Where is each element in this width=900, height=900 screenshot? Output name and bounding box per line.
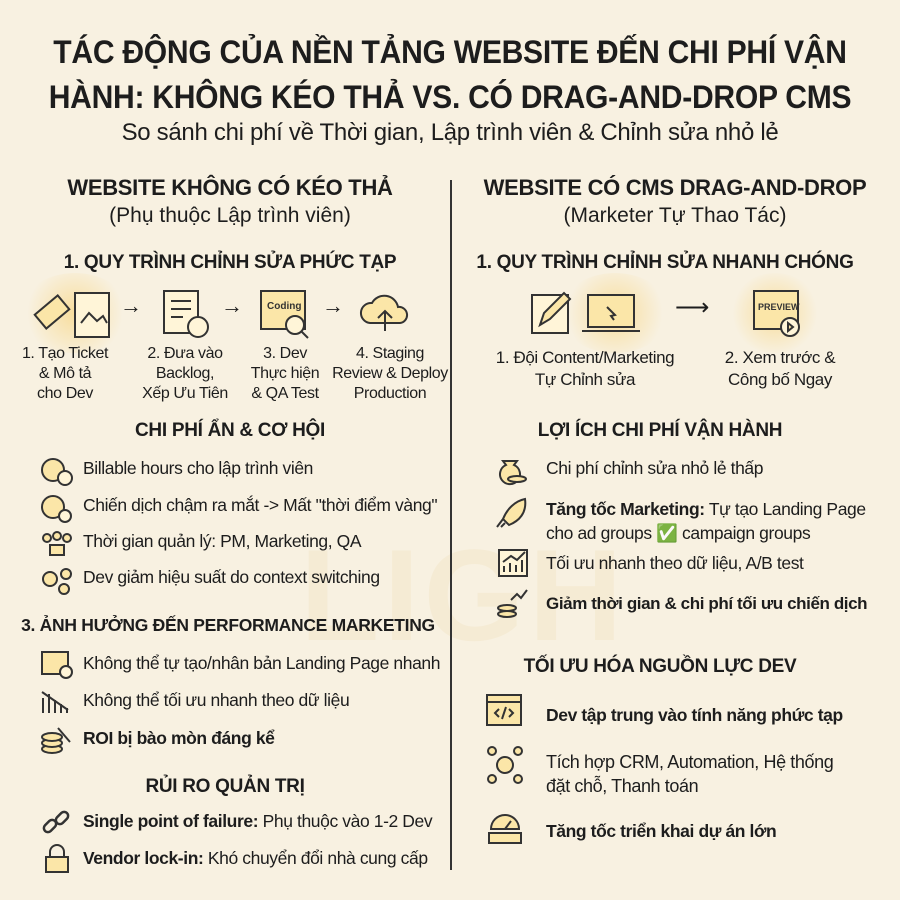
bullet list: hidden costs: Thời gian quản lý: PM, Marketing, QA: [83, 531, 361, 551]
bullet list: hidden costs: Chiến dịch chậm ra mắt -> Mất "thời điểm vàng": [83, 495, 437, 515]
bullet list: hidden costs: Billable hours cho lập trình viên: [83, 458, 313, 478]
bullet list: benefits: [496, 458, 867, 618]
process icons: [33, 273, 408, 353]
process labels: [22, 345, 108, 402]
panel: right: [476, 175, 867, 844]
process labels: & Mô tả: [39, 365, 91, 382]
right subheader: (Marketer Tự Thao Tác): [564, 204, 786, 227]
heading: governance risk: RỦI RO QUẢN TRỊ: [145, 776, 305, 797]
title: [49, 34, 851, 115]
bullet list: benefits: Giảm thời gian & chi phí tối ưu chiến dịch: [546, 594, 867, 613]
bullet list: risk: [42, 810, 432, 873]
process icons: [531, 273, 812, 353]
bullet list: performance: [41, 651, 440, 754]
bullet list: performance: ROI bị bào mòn đáng kể: [83, 728, 274, 748]
panel: left: Production: [354, 385, 426, 402]
bullet list: benefits: Chi phí chỉnh sửa nhỏ lẻ thấp: [546, 458, 763, 478]
process labels: cho Dev: [37, 385, 93, 402]
bullet list: performance: Không thể tối ưu nhanh theo dữ liệu: [83, 690, 349, 710]
bullet list: dev: Tăng tốc triển khai dự án lớn: [546, 821, 776, 841]
heading: benefits: LỢI ÍCH CHI PHÍ VẬN HÀNH: [538, 420, 782, 441]
left header: WEBSITE KHÔNG CÓ KÉO THẢ: [67, 175, 393, 200]
bullet list: hidden costs: [41, 458, 437, 595]
panel: left: 4. Staging: [356, 345, 424, 362]
left subheader: (Phụ thuộc Lập trình viên): [109, 204, 351, 227]
panel: left: Xếp Ưu Tiên: [142, 385, 228, 402]
title: TÁC ĐỘNG CỦA NỀN TẢNG WEBSITE ĐẾN CHI PHÍ VẬN: [53, 34, 847, 70]
panel: left: [21, 174, 448, 873]
subtitle: So sánh chi phí về Thời gian, Lập trình viên & Chỉnh sửa nhỏ lẻ: [122, 119, 778, 146]
watermark: LIGH: [300, 522, 627, 668]
panel: left: 2. Đưa vào: [147, 345, 223, 362]
process icons: Coding: [267, 301, 301, 312]
panel: right: Công bố Ngay: [728, 370, 832, 389]
process labels: Tự Chỉnh sửa: [535, 370, 635, 389]
panel: right: 2. Xem trước &: [725, 348, 835, 367]
panel: left: Backlog,: [156, 365, 214, 382]
title: HÀNH: KHÔNG KÉO THẢ VS. CÓ DRAG-AND-DROP CMS: [49, 79, 851, 115]
heading: process: 1. QUY TRÌNH CHỈNH SỬA PHỨC TẠP: [64, 252, 396, 273]
bullet list: performance: Không thể tự tạo/nhân bản Landing Page nhanh: [83, 653, 440, 673]
heading: fast process: 1. QUY TRÌNH CHỈNH SỬA NHANH CHÓNG: [476, 252, 854, 273]
panel: left: & QA Test: [251, 385, 319, 402]
arrow: →: [221, 293, 243, 318]
bullet list: benefits: Tối ưu nhanh theo dữ liệu, A/B test: [546, 553, 804, 573]
panel: left: Thực hiện: [251, 365, 319, 382]
right header: WEBSITE CÓ CMS DRAG-AND-DROP: [484, 175, 866, 200]
bullet list: risk: Single point of failure: Phụ thuộc vào 1-2 Dev: [83, 811, 432, 831]
bullet list: dev: [486, 694, 843, 844]
process icons: PREVIEW: [758, 302, 800, 312]
panel: left: Review & Deploy: [332, 365, 448, 382]
arrow: ⟶: [675, 294, 709, 321]
bullet list: benefits: cho ad groups ✅ campaign groups: [546, 523, 810, 543]
panel: left: 3. Dev: [263, 345, 307, 362]
heading: hidden costs: CHI PHÍ ẨN & CƠ HỘI: [135, 420, 325, 441]
bullet list: benefits: Tăng tốc Marketing: Tự tạo Landing Page: [546, 499, 866, 519]
bullet list: dev: Tích hợp CRM, Automation, Hệ thống: [546, 752, 833, 772]
bullet list: dev: Dev tập trung vào tính năng phức tạp: [546, 705, 843, 725]
bullet list: risk: Vendor lock-in: Khó chuyển đổi nhà cung cấp: [83, 848, 428, 868]
heading: performance marketing: 3. ẢNH HƯỞNG ĐẾN PERFORMANCE MARKETING: [21, 615, 435, 635]
process labels: 1. Tạo Ticket: [22, 345, 108, 362]
arrow: →: [120, 293, 142, 318]
bullet list: hidden costs: Dev giảm hiệu suất do context switching: [83, 567, 380, 587]
process labels: [496, 348, 674, 389]
bullet list: dev: đặt chỗ, Thanh toán: [546, 776, 698, 796]
process labels: 1. Đội Content/Marketing: [496, 348, 674, 367]
arrow: →: [322, 293, 344, 318]
heading: dev resources: TỐI ƯU HÓA NGUỒN LỰC DEV: [524, 656, 796, 677]
